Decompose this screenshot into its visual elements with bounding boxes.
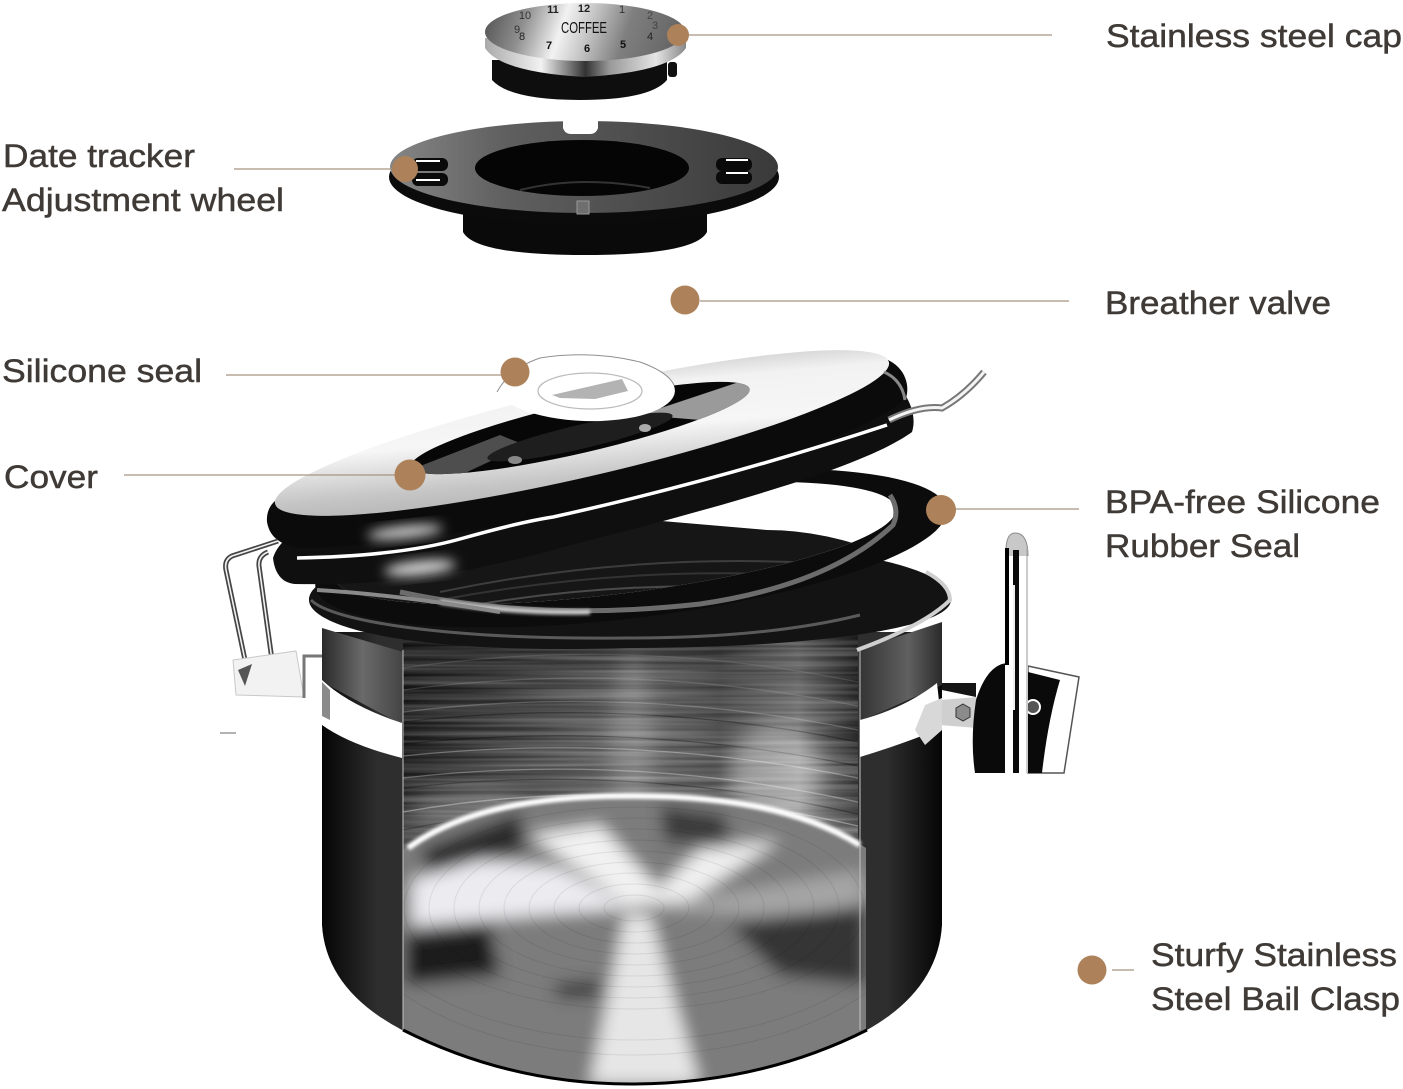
icon: stainless steel cap: 4 — [647, 31, 653, 43]
label: date tracker adjustment wheel: Date tracker — [3, 138, 195, 174]
label: breather valve — [670, 285, 1331, 321]
icon: coffee canister exploded view — [226, 3, 1079, 1089]
label: BPA-free silicone rubber seal — [926, 484, 1380, 564]
label: date tracker adjustment wheel: Adjustment wheel — [2, 182, 284, 218]
icon: stainless steel cap: 10 — [519, 10, 531, 22]
icon: stainless steel cap: 8 — [519, 31, 525, 43]
icon: stainless steel cap: 9 — [514, 24, 520, 36]
icon: stainless steel cap: 3 — [652, 20, 658, 32]
icon: stainless steel cap: 5 — [620, 39, 626, 51]
label: breather valve: Breather valve — [1105, 285, 1331, 321]
icon: stainless steel cap: COFFEE — [561, 20, 607, 37]
label: sturdy stainless steel bail clasp — [1078, 937, 1400, 1017]
silicone seal disc — [494, 352, 676, 424]
icon: stainless steel cap: 7 — [546, 40, 552, 52]
label: sturdy stainless steel bail clasp: Steel Bail Clasp — [1151, 981, 1400, 1017]
canister body — [322, 620, 942, 1089]
icon: BPA-free silicone rubber seal ring — [315, 470, 941, 617]
lid black side — [267, 360, 907, 548]
icon: date tracker adjustment wheel — [389, 118, 779, 255]
icon: stainless steel cap: 12 — [578, 3, 590, 15]
label: cover: Cover — [4, 459, 98, 495]
label: cover — [4, 459, 426, 495]
label: sturdy stainless steel bail clasp: Sturfy Stainless — [1151, 937, 1397, 973]
lower lid band — [273, 395, 914, 584]
label: BPA-free silicone rubber seal: Rubber Seal — [1105, 528, 1300, 564]
label: stainless steel cap: Stainless steel cap — [1106, 18, 1402, 54]
tank floor — [404, 798, 866, 1082]
interior wall — [403, 635, 858, 850]
icon: stainless steel cap: 2 — [647, 10, 653, 22]
lid vent opening — [414, 382, 750, 474]
icon: stainless steel cap: 1 — [619, 4, 625, 16]
canister rim — [309, 540, 951, 650]
label: stainless steel cap — [667, 18, 1402, 54]
label: silicone seal — [2, 353, 530, 389]
label: silicone seal: Silicone seal — [2, 353, 202, 389]
icon: stainless steel cap: 11 — [547, 4, 559, 16]
label: BPA-free silicone rubber seal: BPA-free Silicone — [1105, 484, 1380, 520]
label: date tracker adjustment wheel — [2, 138, 418, 218]
lid steel top — [265, 319, 899, 547]
right bail clasp — [915, 533, 1079, 773]
icon: lid cover — [266, 350, 987, 586]
icon: stainless steel cap — [485, 3, 686, 100]
left bail clasp — [226, 541, 322, 698]
icon: stainless steel cap: 6 — [584, 43, 590, 55]
steel band — [322, 680, 942, 758]
lid hinge clip — [889, 372, 984, 420]
